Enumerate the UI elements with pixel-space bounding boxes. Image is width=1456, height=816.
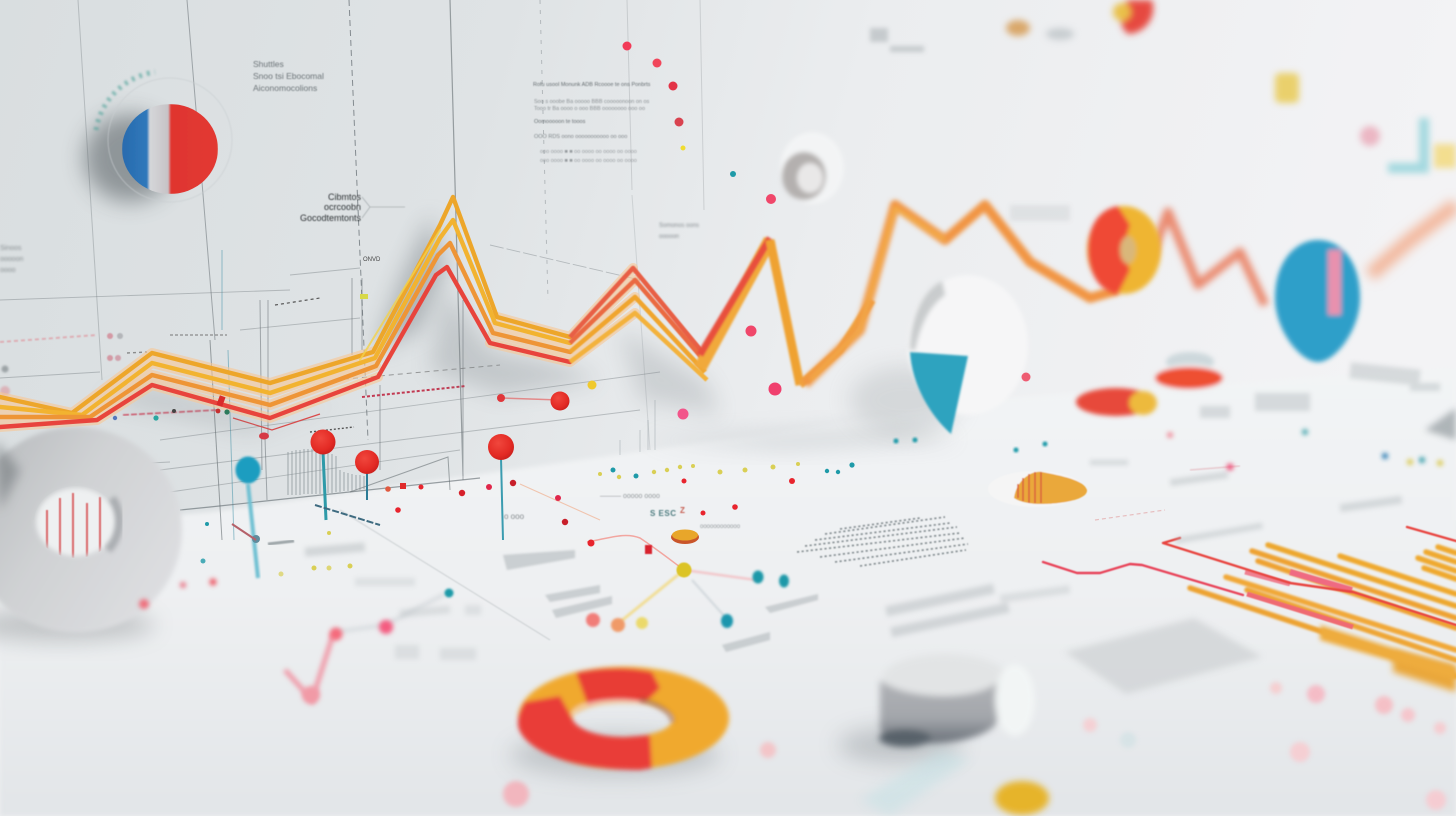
- wall label: small right note: ooooon: [659, 234, 679, 240]
- wall label: data table: [533, 82, 651, 164]
- chart shadow: [100, 215, 720, 432]
- background wall: [0, 0, 1456, 520]
- wall label: centre callout: Gocodtemtonts: [300, 213, 362, 223]
- wall label: centre callout: Cibmtos: [328, 192, 361, 202]
- background floor: [0, 368, 1456, 816]
- floor text snippets: [305, 362, 1456, 694]
- foreground teal smear: [860, 750, 970, 816]
- wall label: centre callout: [300, 192, 405, 223]
- icon: striped yellow pill: [988, 471, 1087, 507]
- grey disc stack: [838, 654, 1035, 763]
- small bar histogram on wall: [288, 400, 655, 495]
- floor text snippets: S ESC: [650, 509, 677, 518]
- wall label: data table: OOO RDS oono ooooooooooo oo ooo: [534, 134, 627, 140]
- wall label: data table: Soo s ooobe Ba ooooo BBB cooooonoon on os: [534, 99, 650, 105]
- floor connector lines: [232, 466, 1240, 700]
- wall label: upper right faint note: [870, 28, 1070, 221]
- wall label: data table: Oomooooon te tooos: [534, 119, 586, 125]
- icon: blue balloon: [1275, 240, 1360, 362]
- pin: red middle: [355, 450, 379, 500]
- icon: small amber token: [671, 530, 699, 544]
- wall label: left edge blurred note: Sinoos: [0, 245, 22, 252]
- icon: red yellow donut: [1087, 206, 1161, 294]
- pin: red tall centre: [488, 434, 514, 540]
- pin: blue: [236, 456, 260, 578]
- floor text snippets: o ooo: [504, 512, 525, 521]
- wall label: left edge blurred note: [0, 245, 23, 274]
- floor text snippets: Z: [680, 506, 685, 515]
- large grey ring: [0, 427, 182, 641]
- wall label: data table: Rofu usool Monunk ADB Rcoooe te ons Ponbrts: [533, 82, 651, 88]
- wall label: data table: ooo oooo ■ ■ oo oooo oo oooo oo oooo: [540, 158, 637, 164]
- wall label: small right note: Somonos oons: [659, 223, 699, 229]
- wall label: centre callout: ocrcoobn: [324, 202, 361, 212]
- scatter dots: yellow: [278, 146, 800, 576]
- wall shadow at floor joint: [640, 425, 960, 450]
- network nodes: [586, 545, 789, 632]
- wall grid lines: [0, 0, 704, 540]
- wall label: top left note: [253, 59, 324, 93]
- wall label: top left note: Shuttles: [253, 59, 284, 69]
- blurred pink dots foreground: [139, 429, 1446, 810]
- wall label: data table: Tooo tr Ba oooo o ooo BBB oooooooo ooo oo: [534, 106, 645, 112]
- bottom donut: [510, 666, 729, 777]
- pin: red tall left: [310, 430, 336, 520]
- wall dashed red and grey lines: [0, 298, 560, 432]
- peach fill between strands: [0, 268, 635, 427]
- wall label: axis note: ONVD: [363, 257, 381, 263]
- line chart: in-focus multi-strand trend: [0, 197, 635, 427]
- wall label: data table: ooo oooo ■ ■ oo oooo oo oooo oo oooo: [540, 149, 637, 155]
- pie chart: white disc with blue wedge: [850, 275, 1028, 434]
- icon: French flag disc: [84, 72, 232, 202]
- scatter dots: teal: [200, 171, 1048, 598]
- floor text snippets: ——— ooooo oooo: [600, 493, 660, 500]
- pin: red back: [497, 392, 570, 464]
- wall label: left edge blurred note: oooo: [0, 267, 16, 274]
- scatter dots: red: [385, 42, 1030, 546]
- line chart: middle zigzag soft focus: [570, 268, 707, 380]
- wall label: left edge blurred note: ooooon: [0, 256, 23, 263]
- icon: grey ball: [780, 132, 844, 204]
- red line and yellow bars bottom right: [1043, 527, 1456, 692]
- wall label: small right note: [659, 223, 699, 240]
- wall label: top left note: Snoo tsi Ebocomal: [253, 71, 324, 81]
- icon: yellow blurred token: [995, 781, 1049, 815]
- floor text snippets: oooooooooooo: [700, 524, 741, 530]
- chart markers: [113, 294, 368, 440]
- halftone text block: [797, 517, 968, 566]
- wall label: top left note: Aiconomocolions: [253, 83, 317, 93]
- icon: faint yellow and pink blurred tokens: [1006, 0, 1456, 168]
- pills: red and yellow tokens: [1076, 352, 1227, 416]
- line chart: out-of-focus continuation: [700, 205, 1456, 385]
